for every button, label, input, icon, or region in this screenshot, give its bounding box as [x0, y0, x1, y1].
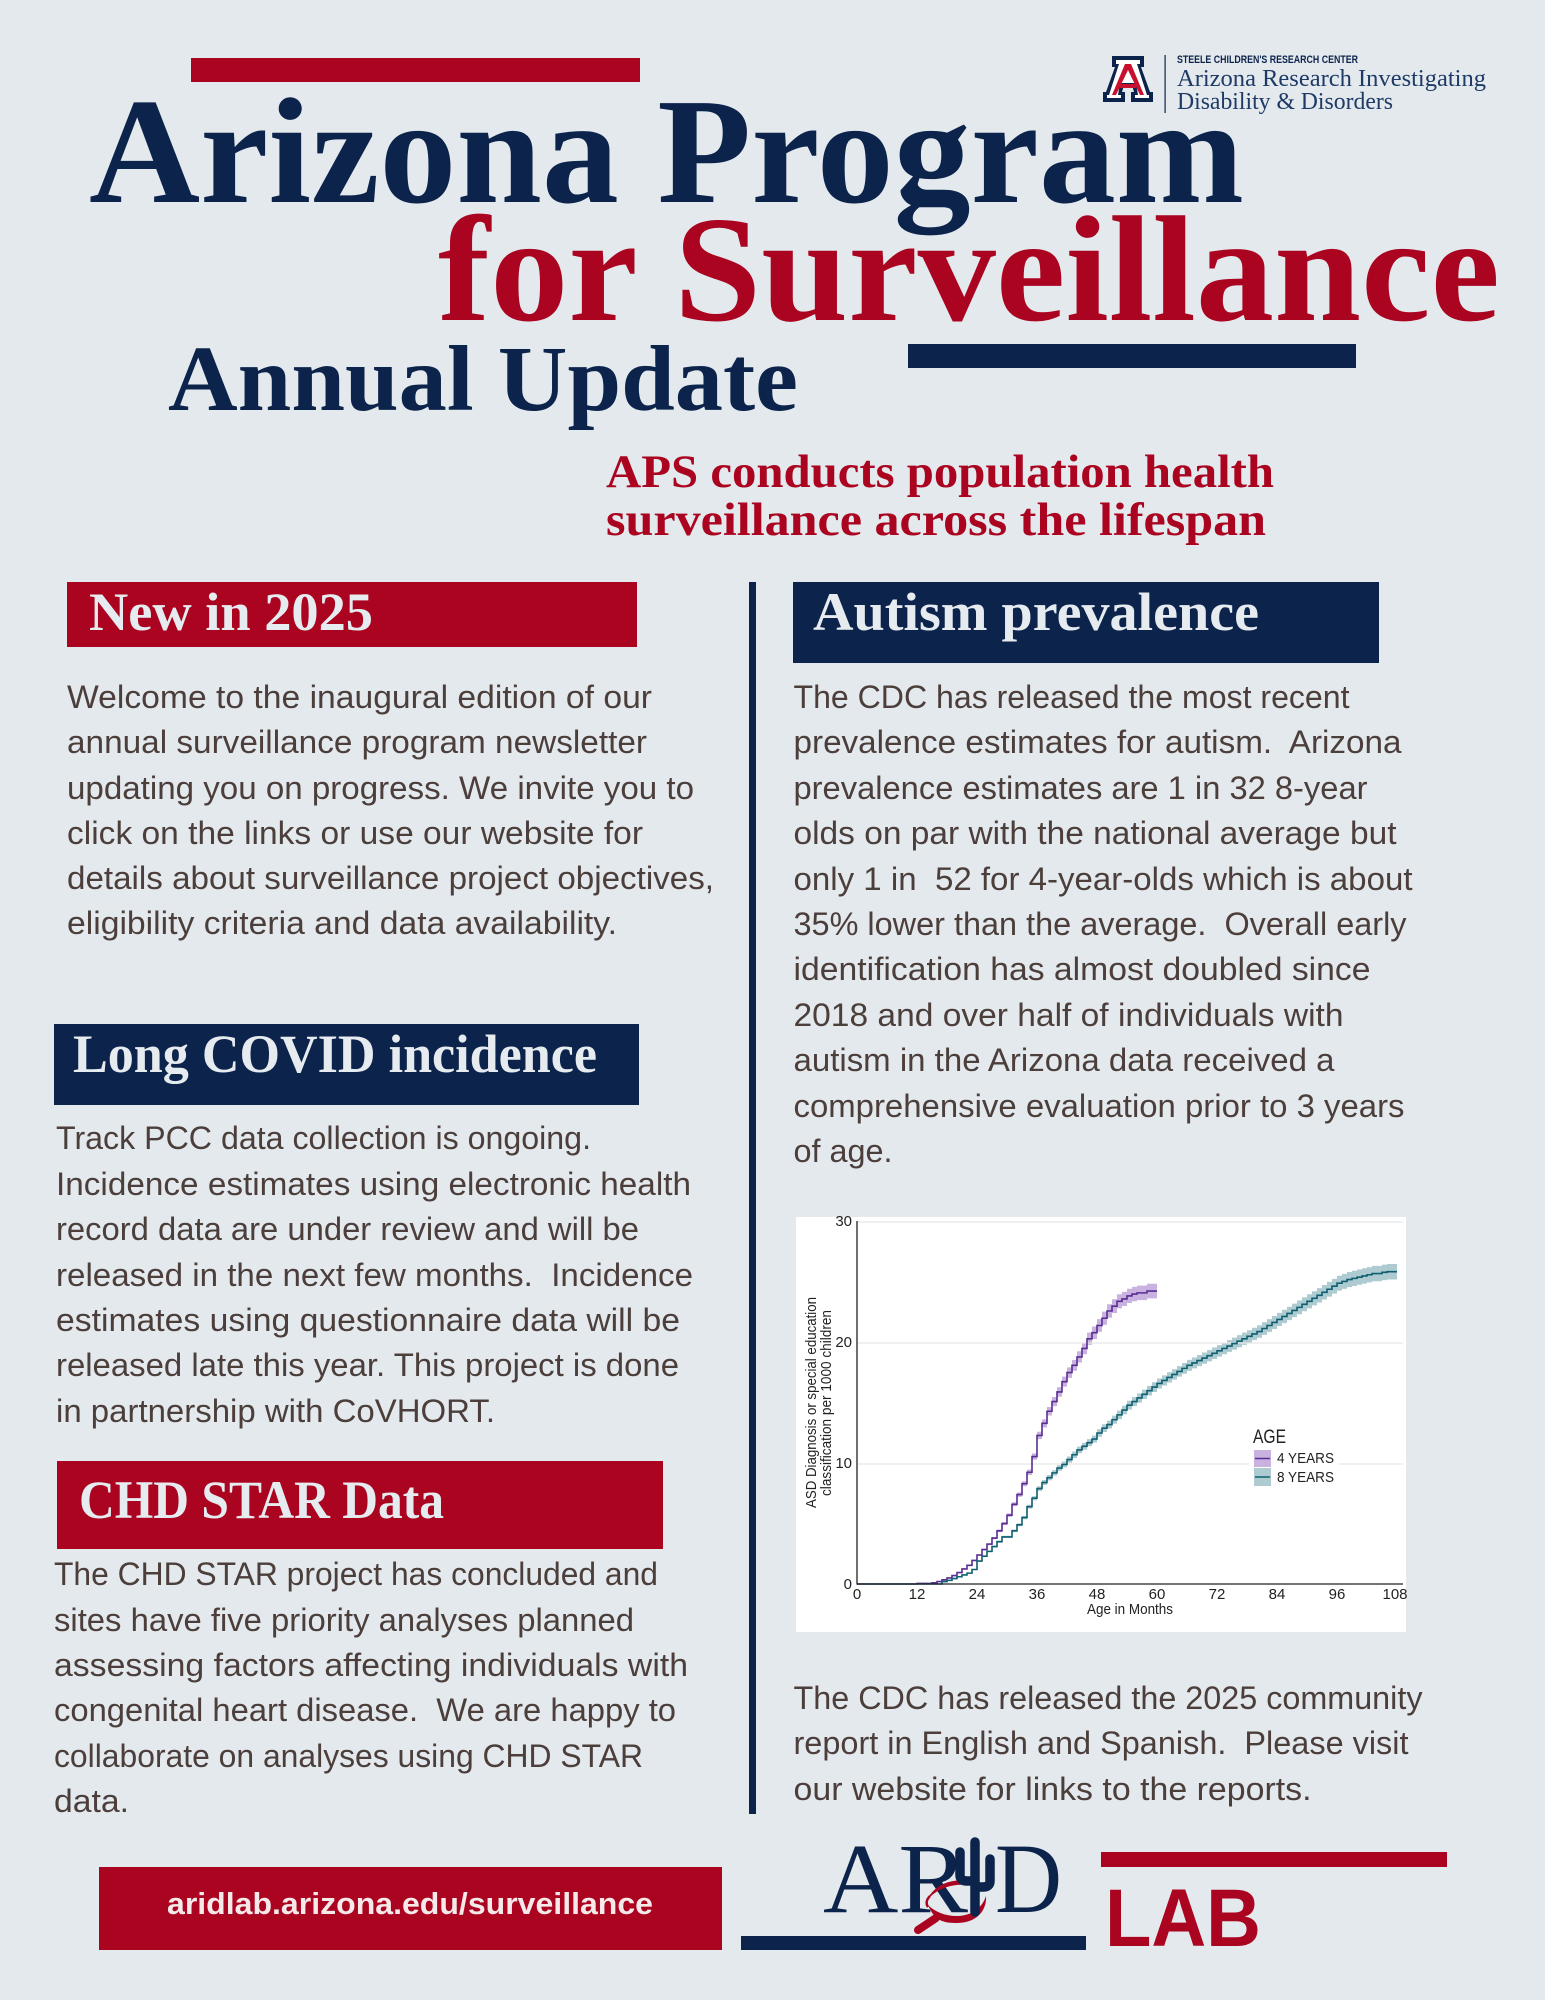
text block: welcome	[67, 679, 714, 941]
icon: block A	[1103, 56, 1153, 102]
x axis labels: 12	[909, 1586, 925, 1603]
text block: CDC prevalence: only 1 in 52 for 4-year-olds which is about	[794, 861, 1413, 897]
navy accent bar	[908, 344, 1356, 368]
y axis labels: 10	[835, 1455, 852, 1472]
x axis labels: 0	[853, 1586, 861, 1603]
text block: CHD STAR: congenital heart disease. We are happy to	[54, 1692, 676, 1728]
column divider	[749, 582, 756, 1814]
text block: Track PCC	[56, 1120, 693, 1429]
footer: LAB wordmark: LAB	[1105, 1873, 1261, 1964]
text block: CDC prevalence: The CDC has released the most recent	[794, 679, 1350, 715]
logo: University of Arizona ARID: STEELE CHILDREN'S RESEARCH CENTER	[1177, 54, 1358, 66]
navy underline	[741, 1936, 1086, 1950]
legend: 4 YEARS	[1277, 1450, 1334, 1467]
heading: Long COVID incidence	[54, 1024, 639, 1105]
text block: welcome: Welcome to the inaugural edition of our	[67, 679, 652, 715]
x axis labels: 60	[1149, 1586, 1165, 1603]
text block: Track PCC: Track PCC data collection is ongoing.	[56, 1120, 591, 1156]
red accent bar	[191, 58, 640, 82]
x axis title: Age in Months	[1087, 1601, 1173, 1618]
y axis labels	[835, 1213, 852, 1593]
line chart: ASD diagnosis by age	[796, 1213, 1408, 1632]
text block: community report: our website for links to the reports.	[794, 1771, 1312, 1807]
title line: for Surveillance: for Surveillance	[438, 185, 1500, 353]
text block: CHD STAR: data.	[54, 1783, 129, 1819]
tagline: APS conducts population health	[606, 446, 1274, 498]
y axis labels: 30	[835, 1213, 852, 1230]
logo: University of Arizona ARID: Arizona Research Investigating	[1177, 66, 1486, 92]
text block: welcome: updating you on progress. We invite you to	[67, 770, 694, 806]
panel: Autism prevalence	[793, 582, 1422, 1807]
text block: CDC prevalence: prevalence estimates are 1 in 32 8-year	[794, 770, 1368, 806]
text block: CDC prevalence: of age.	[794, 1133, 892, 1169]
text block: welcome: annual surveillance program newsletter	[67, 724, 647, 760]
text block: CDC prevalence: 35% lower than the average. Overall early	[794, 906, 1406, 942]
x axis labels: 84	[1269, 1586, 1285, 1603]
axes	[857, 1221, 1403, 1584]
text block: CDC prevalence: olds on par with the national average but	[794, 815, 1397, 851]
text block: CDC prevalence: comprehensive evaluation prior to 3 years	[794, 1088, 1404, 1124]
y axis labels: 20	[835, 1334, 852, 1351]
tagline: surveillance across the lifespan	[606, 494, 1266, 546]
band: 8 years	[857, 1264, 1397, 1584]
text block: CHD STAR	[54, 1556, 688, 1819]
panel: CHD STAR Data	[54, 1461, 688, 1819]
y axis title	[803, 1297, 835, 1508]
footer: website link	[99, 1867, 722, 1950]
footer: website link: aridlab.arizona.edu/surveillance	[167, 1886, 653, 1921]
text block: CHD STAR: The CHD STAR project has concluded and	[54, 1556, 658, 1592]
text block: welcome: click on the links or use our website for	[67, 815, 643, 851]
heading: New in 2025	[67, 582, 637, 647]
legend: 8 YEARS	[1277, 1469, 1334, 1486]
y axis labels: 0	[844, 1576, 852, 1593]
text block: community report	[794, 1680, 1422, 1807]
text block: CHD STAR: assessing factors affecting individuals with	[54, 1647, 688, 1683]
x axis labels: 96	[1329, 1586, 1345, 1603]
text block: community report: The CDC has released the 2025 community	[794, 1680, 1422, 1716]
tagline	[606, 446, 1274, 546]
band: 4 years	[857, 1284, 1157, 1584]
x axis labels: 48	[1089, 1586, 1105, 1603]
panel: New in 2025	[67, 582, 714, 941]
x axis labels: 24	[969, 1586, 985, 1603]
footer: ARID logo: D	[995, 1823, 1062, 1934]
title line: Arizona Program: Arizona Program	[89, 67, 1244, 235]
footer: LAB wordmark	[1101, 1852, 1447, 1964]
text block: Track PCC: released late this year. This project is done	[56, 1347, 679, 1383]
text block: Track PCC: Incidence estimates using electronic health	[56, 1166, 691, 1202]
text block: Track PCC: released in the next few months. Incidence	[56, 1257, 693, 1293]
text block: Track PCC: estimates using questionnaire data will be	[56, 1302, 680, 1338]
footer: ARID logo	[741, 1823, 1086, 1950]
y axis title: classification per 1000 children	[818, 1310, 835, 1496]
panel: Long COVID incidence	[54, 1024, 693, 1429]
text block: welcome: details about surveillance project objectives,	[67, 860, 714, 896]
text block: Track PCC: record data are under review and will be	[56, 1211, 639, 1247]
logo: University of Arizona ARID: Disability & Disorders	[1177, 89, 1393, 115]
line: 4 years	[857, 1291, 1157, 1584]
x axis labels: 108	[1382, 1586, 1408, 1603]
text block: welcome: eligibility criteria and data availability.	[67, 905, 617, 941]
y axis title: ASD Diagnosis or special education	[803, 1297, 820, 1508]
heading: CHD STAR Data	[57, 1461, 663, 1549]
logo wordmark: AR	[823, 1823, 968, 1934]
header	[89, 58, 1500, 546]
text block: CDC prevalence: identification has almost doubled since	[794, 951, 1370, 987]
grid lines	[857, 1222, 1403, 1464]
x axis labels: 72	[1209, 1586, 1225, 1603]
text block: CDC prevalence: 2018 and over half of individuals with	[794, 997, 1344, 1033]
heading: Long COVID incidence: Long COVID incidence	[73, 1024, 597, 1084]
x axis labels	[853, 1586, 1408, 1603]
line: 8 years	[857, 1272, 1397, 1584]
logo: University of Arizona ARID	[1103, 54, 1486, 115]
legend	[1249, 1427, 1339, 1486]
text block: CHD STAR: collaborate on analyses using CHD STAR	[54, 1738, 643, 1774]
text block: CDC prevalence: prevalence estimates for autism. Arizona	[794, 724, 1402, 760]
legend: AGE	[1253, 1427, 1286, 1448]
icon: magnifying glass	[918, 1881, 986, 1930]
heading: CHD STAR Data: CHD STAR Data	[79, 1470, 444, 1530]
heading: New in 2025: New in 2025	[89, 582, 373, 642]
text block: CHD STAR: sites have five priority analyses planned	[54, 1602, 634, 1638]
text block: community report: report in English and Spanish. Please visit	[794, 1725, 1409, 1761]
heading: Autism prevalence	[793, 582, 1379, 663]
heading: Autism prevalence: Autism prevalence	[813, 582, 1259, 642]
icon: cactus	[960, 1842, 990, 1912]
text block: CDC prevalence: autism in the Arizona data received a	[794, 1042, 1335, 1078]
text block: CDC prevalence	[794, 679, 1413, 1169]
x axis labels: 36	[1029, 1586, 1045, 1603]
text block: Track PCC: in partnership with CoVHORT.	[56, 1393, 495, 1429]
subtitle: Annual Update: Annual Update	[168, 328, 798, 431]
